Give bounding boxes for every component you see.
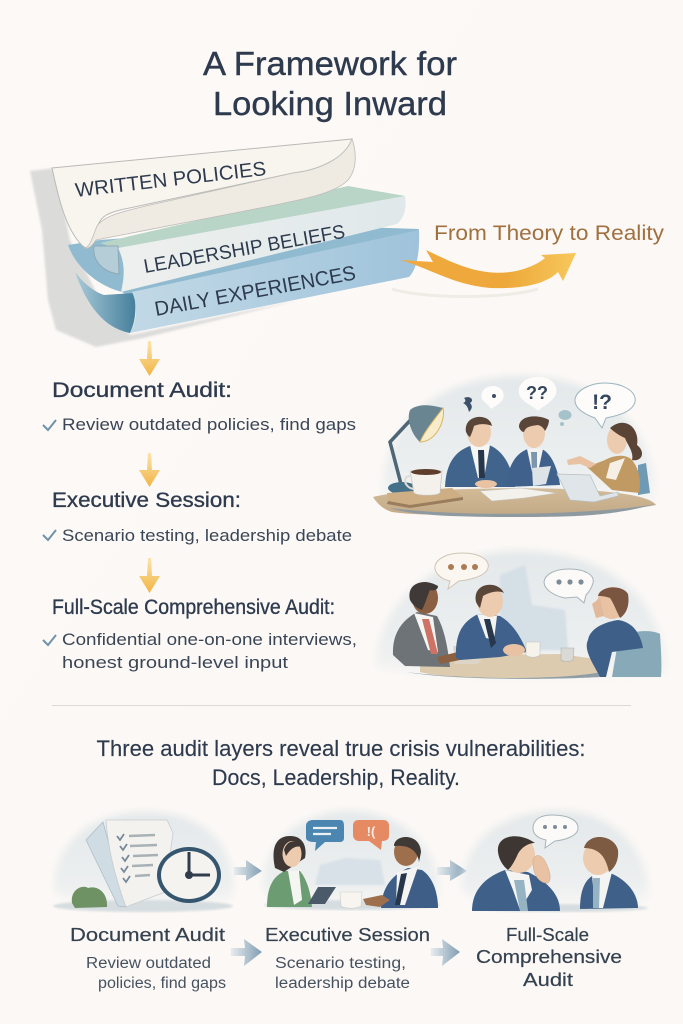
checkmark bbox=[43, 635, 56, 645]
column: full-scale comprehensive audit bbox=[476, 924, 622, 990]
column: executive session: Executive Session bbox=[265, 924, 430, 945]
step: full-scale audit bbox=[43, 596, 357, 672]
flow arrow 2 bbox=[437, 860, 467, 881]
checkmark bbox=[43, 420, 56, 430]
flow arrow 1 bbox=[234, 860, 262, 881]
page: written policies bbox=[52, 139, 355, 249]
step: full-scale audit: Confidential one-on-one interviews, bbox=[62, 630, 357, 649]
down arrow 1 bbox=[139, 341, 160, 376]
title: A Framework for bbox=[203, 45, 457, 82]
man whispering bbox=[472, 836, 560, 911]
desk lamp bbox=[388, 405, 444, 494]
flow arrow 3 bbox=[231, 939, 262, 966]
speech bubbles bbox=[306, 820, 389, 851]
book: daily experiences bbox=[68, 225, 419, 333]
step: full-scale audit: honest ground-level input bbox=[62, 653, 288, 672]
step: document audit bbox=[43, 379, 356, 434]
arrow: theory to reality bbox=[392, 250, 576, 297]
column: executive session: leadership debate bbox=[275, 975, 410, 992]
woman with tablet bbox=[267, 836, 336, 907]
book: leadership beliefs: LEADERSHIP BELIEFS bbox=[142, 221, 347, 278]
table bbox=[373, 488, 656, 515]
step: full-scale audit: Full-Scale Comprehensive Audit: bbox=[52, 596, 335, 619]
laptop bbox=[557, 474, 618, 502]
stacked books graphic bbox=[30, 139, 419, 347]
floor band bbox=[472, 904, 648, 912]
man with glasses bbox=[363, 837, 438, 908]
book: leadership beliefs bbox=[94, 186, 406, 292]
speech bubbles bbox=[463, 377, 635, 428]
back folder bbox=[86, 822, 126, 907]
title bbox=[203, 45, 457, 122]
step: executive session: Scenario testing, leadership debate bbox=[62, 526, 352, 545]
speech bubbles: !( bbox=[367, 824, 376, 839]
title: Looking Inward bbox=[213, 85, 447, 122]
clock bbox=[157, 847, 221, 903]
person left bbox=[445, 417, 515, 488]
step: executive session: Executive Session: bbox=[52, 489, 241, 512]
column: full-scale comprehensive audit: Audit bbox=[523, 969, 573, 990]
column: executive session bbox=[265, 924, 430, 992]
summary statement: Docs, Leadership, Reality. bbox=[212, 765, 460, 790]
book: daily experiences: DAILY EXPERIENCES bbox=[153, 261, 358, 321]
wooden board and coffee bbox=[387, 469, 463, 508]
column: document audit: Review outdated bbox=[86, 955, 211, 972]
bottom illustration: full-scale audit bbox=[462, 811, 648, 912]
person left with tablet bbox=[393, 582, 494, 667]
speech bubbles: ?? bbox=[526, 383, 548, 403]
column: full-scale comprehensive audit: Comprehensive bbox=[476, 946, 622, 967]
person right back view bbox=[587, 587, 661, 677]
cups bbox=[526, 642, 574, 662]
city silhouette bbox=[500, 565, 568, 650]
plant bbox=[72, 887, 107, 908]
checkmark bbox=[43, 530, 56, 540]
step: document audit: Review outdated policies, find gaps bbox=[62, 415, 356, 434]
cup bbox=[340, 892, 362, 908]
flow arrow 4 bbox=[431, 939, 460, 966]
label: from theory to reality: From Theory to Reality bbox=[434, 222, 665, 245]
divider bbox=[52, 704, 631, 706]
man listening bbox=[580, 837, 638, 909]
column: document audit: Document Audit bbox=[70, 924, 225, 945]
step: executive session bbox=[43, 489, 352, 545]
person middle bbox=[506, 416, 560, 487]
papers bbox=[480, 488, 557, 501]
page: written policies: WRITTEN POLICIES bbox=[74, 158, 267, 202]
summary statement: Three audit layers reveal true crisis vulnerabilities: bbox=[96, 736, 586, 761]
column: document audit: policies, find gaps bbox=[98, 975, 226, 992]
step: document audit: Document Audit: bbox=[52, 379, 232, 402]
speech bubbles: !? bbox=[592, 391, 612, 414]
bottom illustration: document audit bbox=[53, 812, 233, 912]
down arrow 3 bbox=[139, 558, 160, 593]
back shadow page bbox=[30, 168, 300, 347]
table bbox=[420, 654, 603, 679]
column: full-scale comprehensive audit: Full-Scale bbox=[506, 924, 589, 945]
bottom illustration: executive session bbox=[263, 811, 440, 910]
summary statement bbox=[96, 736, 586, 790]
column: document audit bbox=[70, 924, 226, 992]
person right woman bbox=[567, 423, 650, 495]
illustration: comprehensive audit interview bbox=[376, 551, 666, 679]
speech bubble bbox=[533, 815, 578, 848]
checklist paper bbox=[106, 820, 173, 907]
down arrow 2 bbox=[139, 453, 160, 487]
speech bubbles bbox=[435, 553, 593, 603]
illustration: document audit meeting bbox=[373, 376, 656, 517]
column: executive session: Scenario testing, bbox=[275, 955, 406, 972]
person middle bbox=[456, 585, 527, 660]
